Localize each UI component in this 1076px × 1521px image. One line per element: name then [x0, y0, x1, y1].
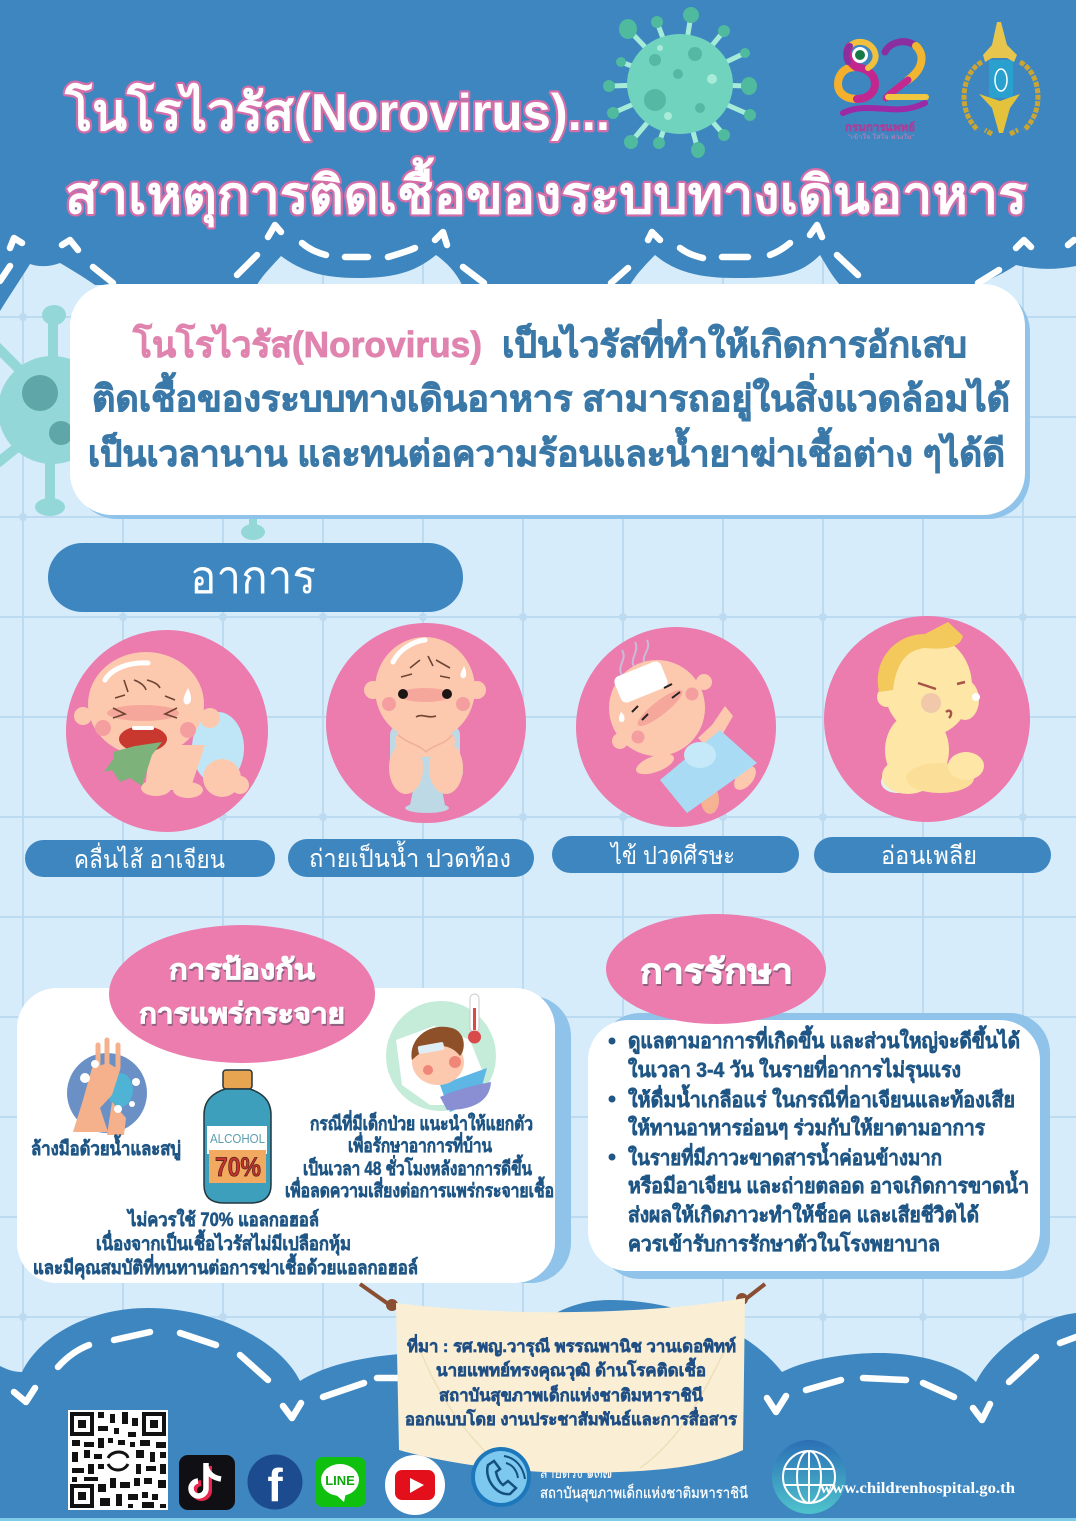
intro box — [70, 284, 1030, 519]
text: isolation advice — [285, 1110, 554, 1202]
heading: symptoms: อาการ — [190, 551, 316, 603]
source text — [405, 1334, 738, 1429]
left decorative virus — [0, 305, 265, 540]
website address: www.childrenhospital.go.th — [820, 1480, 1015, 1497]
title line 1: โนโรไวรัส(Norovirus)... — [64, 81, 610, 142]
icon: TikTok — [179, 1455, 235, 1510]
hanging source banner — [360, 1284, 765, 1473]
symptom 1: vomiting baby — [66, 630, 268, 832]
icon: alcohol bottle — [204, 1070, 271, 1203]
treatment panel — [588, 1013, 1050, 1279]
source text: ที่มา : รศ.พญ.วารุณี พรรณพานิช วานเดอพิทท์ — [407, 1334, 736, 1357]
icon: sick child in bed — [386, 994, 496, 1112]
header band with scallops — [0, 0, 1076, 311]
intro line 1 — [132, 319, 967, 365]
text: hotline — [540, 1465, 748, 1503]
symptom label 3 — [552, 836, 799, 873]
symptom label 2: ถ่ายเป็นน้ำ ปวดท้อง — [309, 840, 511, 873]
bottom hills — [0, 1300, 1076, 1521]
treatment bullet list: ให้ทานอาหารอ่อนๆ ร่วมกับให้ยาตามอาการ — [628, 1115, 986, 1140]
text: isolation advice: เป็นเวลา 48 ชั่วโมงหลังอาการดีขึ้น — [303, 1154, 532, 1180]
heading: treatment: การรักษา — [640, 953, 793, 991]
symptom 2: toilet baby — [326, 623, 526, 823]
scallop stitching dashes — [0, 225, 1074, 283]
treatment bullet list: ให้ดื่มน้ำเกลือแร่ ในกรณีที่อาเจียนและท้องเสีย — [628, 1084, 1015, 1112]
hill stitching dashes — [14, 1332, 1076, 1420]
heading: symptoms — [48, 543, 463, 612]
source text: สถาบันสุขภาพเด็กแห่งชาติมหาราชินี — [439, 1383, 703, 1406]
icon: YouTube — [385, 1455, 445, 1515]
heading: treatment — [606, 914, 826, 1024]
intro line 2: ติดเชื้อของระบบทางเดินอาหาร สามารถอยู่ในสิ่งแวดล้อมได้ — [92, 372, 1010, 422]
text: isolation advice: เพื่อลดความเสี่ยงต่อการแพร่กระจายเชื้อ — [285, 1176, 554, 1202]
text: hotline: สถาบันสุขภาพเด็กแห่งชาติมหาราชินี — [540, 1483, 748, 1503]
text: alcohol warning — [33, 1208, 418, 1280]
treatment bullet list: ส่งผลให้เกิดภาวะทำให้ช็อค และเสียชีวิตได้ — [628, 1201, 979, 1227]
symptom label 4 — [814, 837, 1051, 873]
symptom 4: weak baby — [824, 616, 1030, 822]
logo: 82 years Department of Medical Services: "เข้าใจ ใส่ใจ ห่วงใย" — [848, 133, 914, 141]
heading: prevention — [109, 925, 375, 1063]
title — [64, 81, 1027, 228]
icon: Facebook: f — [267, 1459, 283, 1511]
text: alcohol warning: ไม่ควรใช้ 70% แอลกอฮอล์ — [126, 1208, 319, 1231]
icon: green virus — [603, 7, 757, 158]
text: hotline: สายตรง ๑๓๗ — [540, 1465, 612, 1482]
treatment bullet list: ในรายที่มีภาวะขาดสารน้ำค่อนข้างมาก — [628, 1142, 942, 1170]
intro line 1: เป็นไวรัสที่ทำให้เกิดการอักเสบ — [502, 319, 967, 365]
treatment bullet list — [608, 1025, 1029, 1256]
symptom label 1 — [25, 840, 275, 877]
symptom 3: fever baby — [576, 627, 776, 827]
icon: LINE — [315, 1457, 366, 1507]
logo: 82 years Department of Medical Services: กรมการแพทย์ — [845, 121, 915, 134]
text: isolation advice: เพื่อรักษาอาการที่บ้าน — [348, 1132, 492, 1157]
logo: 82 years Department of Medical Services — [838, 42, 926, 141]
icon: phone hotline — [471, 1447, 531, 1507]
icon: Facebook — [248, 1454, 302, 1511]
prevention panel — [17, 988, 571, 1283]
heading: prevention: การแพร่กระจาย — [139, 998, 345, 1029]
symptom label 3: ไข้ ปวดศีรษะ — [609, 841, 735, 870]
source text: ออกแบบโดย งานประชาสัมพันธ์และการสื่อสาร — [405, 1407, 738, 1429]
icon: globe — [772, 1440, 846, 1514]
text: alcohol warning: เนื่องจากเป็นเชื้อไวรัสไม่มีเปลือกหุ้ม — [96, 1229, 351, 1256]
icon: washing hands — [67, 1040, 147, 1135]
symptom label 2 — [288, 839, 534, 877]
intro line 3: เป็นเวลานาน และทนต่อความร้อนและน้ำยาฆ่าเชื้อต่าง ๆได้ดี — [88, 427, 1005, 474]
icon: alcohol bottle: ALCOHOL — [210, 1131, 265, 1146]
symptom label 4: อ่อนเพลีย — [881, 842, 977, 870]
logo: hospital emblem — [964, 22, 1038, 134]
text: wash hands: ล้างมือด้วยน้ำและสบู่ — [31, 1134, 181, 1161]
text: alcohol warning: และมีคุณสมบัติที่ทนทานต่อการฆ่าเชื้อด้วยแอลกอฮอล์ — [33, 1253, 418, 1280]
treatment bullet list: ควรเข้ารับการรักษาตัวในโรงพยาบาล — [628, 1231, 940, 1256]
treatment bullet list: ดูแลตามอาการที่เกิดขึ้น และส่วนใหญ่จะดีขึ้นได้ — [628, 1025, 1020, 1055]
symptom label 1: คลื่นไส้ อาเจียน — [74, 842, 225, 874]
treatment bullet list: ในเวลา 3-4 วัน ในรายที่อาการไม่รุนแรง — [628, 1054, 961, 1084]
intro line 1: โนโรไวรัส(Norovirus) — [132, 323, 482, 365]
icon: alcohol bottle: 70% — [215, 1152, 261, 1182]
heading: prevention: การป้องกัน — [169, 954, 315, 985]
source text: นายแพทย์ทรงคุณวุฒิ ด้านโรคติดเชื้อ — [436, 1357, 706, 1381]
title line 2: สาเหตุการติดเชื้อของระบบทางเดินอาหาร — [65, 157, 1027, 228]
treatment bullet list: หรือมีอาเจียน และถ่ายตลอด อาจเกิดการขาดน้ำ — [628, 1170, 1029, 1198]
icon: LINE: LINE — [325, 1473, 355, 1488]
QR code — [68, 1410, 168, 1510]
text: isolation advice: กรณีที่มีเด็กป่วย แนะนำให้แยกตัว — [310, 1110, 533, 1135]
